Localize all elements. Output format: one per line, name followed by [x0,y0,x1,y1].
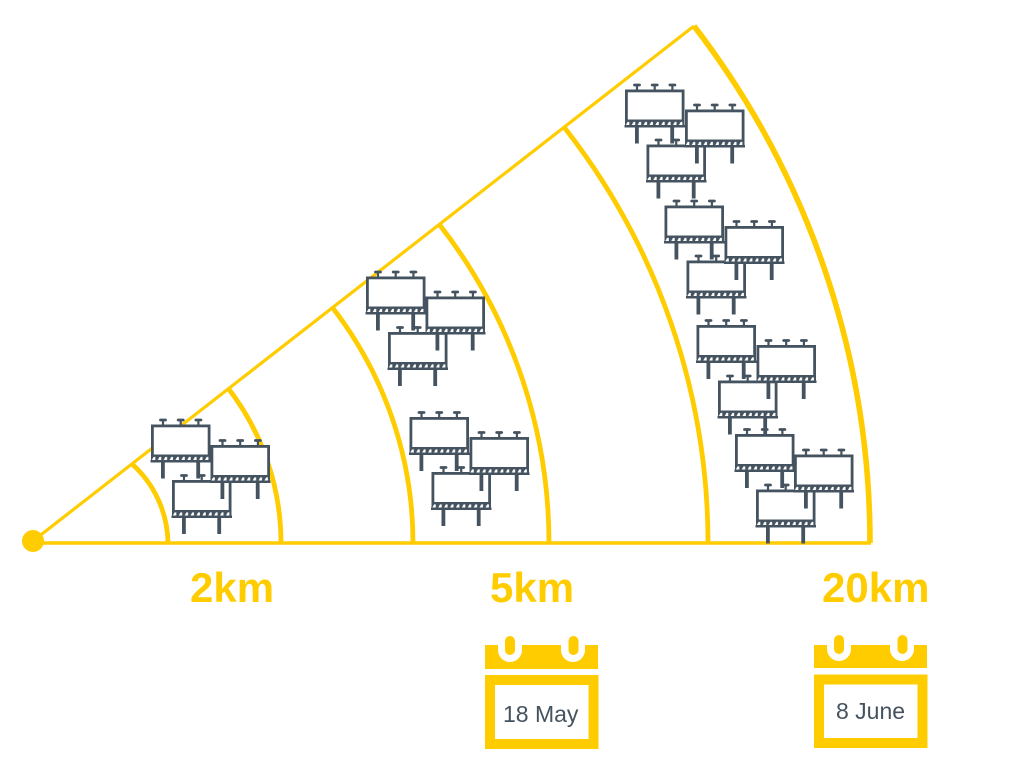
billboards: 20km cluster 3 [696,320,816,434]
label: 2km: 2km [190,564,274,611]
billboards: 20km cluster 2 [664,201,784,314]
date text: 18 May [503,701,579,727]
billboards: 20km cluster 1 [624,85,745,198]
arc 1 [132,464,168,543]
arc: 20km [694,26,870,543]
calendar: 8 June [814,635,927,743]
sector upper edge [33,26,694,541]
sector baseline [33,541,871,545]
arc: 5km [439,224,549,543]
billboards: 5km cluster upper [366,272,486,386]
label: 20km: 20km [822,564,929,611]
arc: 2km [228,388,281,543]
billboards: 20km cluster 4 [734,430,854,544]
label: 5km: 5km [490,564,574,611]
arc 3 [332,307,413,543]
sector diagram [33,26,871,543]
arc 5 [564,127,708,543]
billboards: 5km cluster lower [409,412,530,526]
billboards: 2km cluster [150,420,270,534]
origin dot [22,530,44,552]
date text: 8 June [836,698,905,724]
calendar: 18 May [485,636,598,744]
